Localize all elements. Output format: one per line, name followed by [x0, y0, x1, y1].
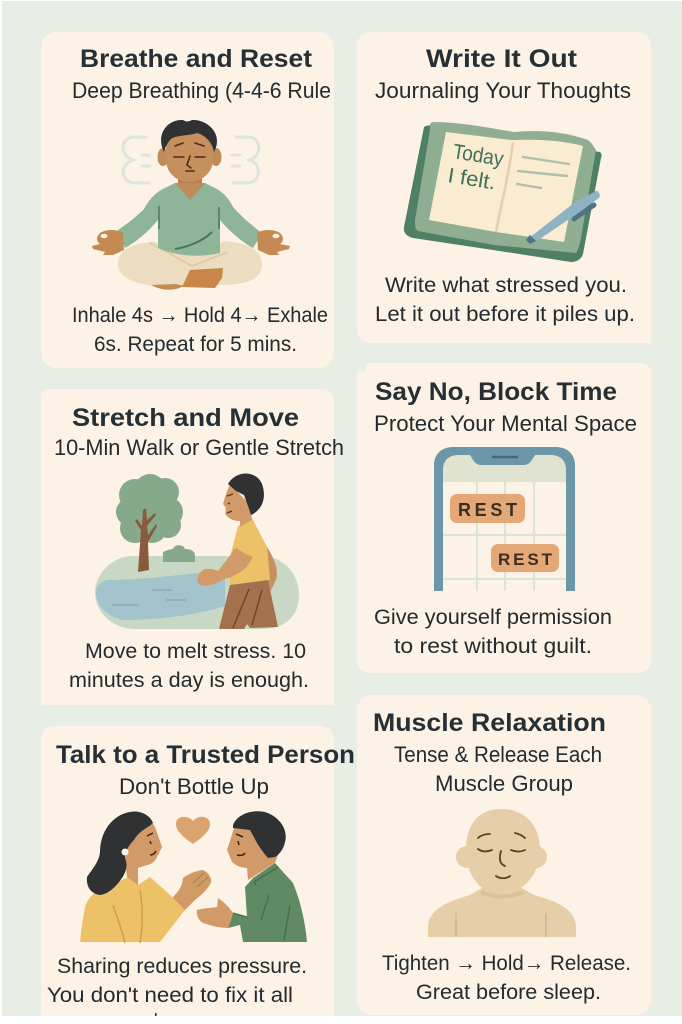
- body text: repeat: 6s. Repeat for 5 mins.: [94, 332, 297, 356]
- icon: relaxed head and shoulders: [428, 809, 576, 937]
- heading: muscle relaxation: Muscle Relaxation: [373, 709, 606, 737]
- body text: move to melt stress: Move to melt stress. 10: [85, 639, 306, 663]
- body text: give yourself permission: Give yourself permission: [374, 605, 612, 629]
- panel: stretch and move: [41, 389, 344, 705]
- body text: let it out: Let it out before it piles up.: [375, 302, 635, 326]
- body text: you don't need to fix it all: You don't need to fix it all: [47, 983, 293, 1007]
- panel: say no, block time: [357, 363, 651, 673]
- journal handwriting: Today: [451, 140, 506, 171]
- icon: two people talking with heart: [80, 811, 307, 943]
- subheading: muscle group: Muscle Group: [435, 771, 573, 796]
- body text: breathing steps: Inhale 4s → Hold 4→ Exhale: [72, 303, 328, 327]
- rest block two: [491, 544, 559, 572]
- heading: talk to a trusted person: Talk to a Trusted Person: [56, 741, 355, 769]
- icon: phone calendar with rest blocks: [434, 447, 575, 591]
- subheading: don't bottle up: Don't Bottle Up: [119, 774, 269, 799]
- panel: talk to a trusted person: [41, 726, 355, 1016]
- rest block one: [450, 494, 525, 523]
- body text: tighten hold release: Tighten → Hold→ Release.: [382, 951, 631, 975]
- heading: stretch and move: Stretch and Move: [72, 404, 299, 432]
- panel: muscle relaxation: [357, 695, 651, 1015]
- subheading: tense and release: Tense & Release Each: [394, 742, 602, 767]
- icon: meditating person: [92, 120, 290, 290]
- heading: write it out: Write It Out: [426, 45, 578, 73]
- subheading: protect mental space: Protect Your Mental Space: [374, 411, 637, 436]
- icon: heart: [176, 817, 210, 844]
- body text: rest without guilt: to rest without guilt.: [394, 634, 592, 658]
- panel: write it out: [357, 32, 651, 343]
- journal handwriting line two: I felt.: [446, 164, 497, 194]
- heading: say no, block time: Say No, Block Time: [375, 378, 617, 406]
- body text: write what stressed: Write what stressed you.: [385, 273, 627, 297]
- panel: breathe and reset: [41, 32, 334, 368]
- rest block one: REST: [458, 500, 517, 520]
- heading: breathe and reset: Breathe and Reset: [80, 45, 313, 73]
- subheading: journaling: Journaling Your Thoughts: [375, 78, 631, 103]
- rest block two: REST: [498, 550, 553, 569]
- subheading: deep breathing: Deep Breathing (4-4-6 Rule: [72, 78, 331, 103]
- body text: great before sleep: Great before sleep.: [416, 980, 601, 1004]
- body text: sharing reduces pressure: Sharing reduces pressure.: [57, 954, 307, 978]
- subheading: walk or stretch: 10-Min Walk or Gentle Stretch: [54, 435, 344, 460]
- icon: open journal with pen: [404, 122, 602, 262]
- body text: minutes a day: minutes a day is enough.: [69, 668, 309, 692]
- icon: person walking in park: [95, 474, 299, 629]
